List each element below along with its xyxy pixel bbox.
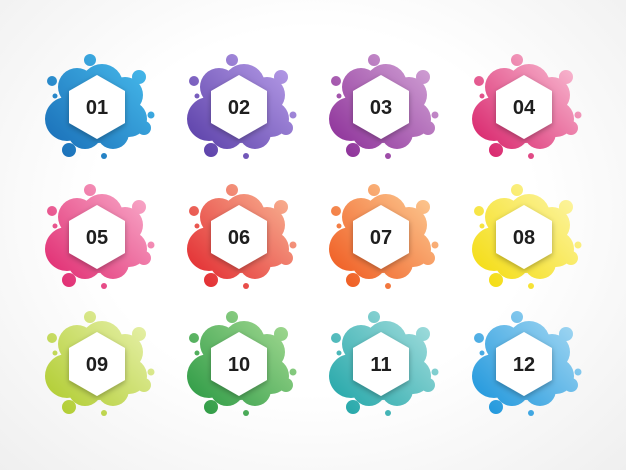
item 03 xyxy=(329,54,438,159)
item 10: 10 xyxy=(228,354,250,376)
item 08 xyxy=(472,184,582,289)
item 01 xyxy=(45,54,154,159)
item 06: 06 xyxy=(228,227,250,249)
item 12 xyxy=(472,311,582,416)
item 02 xyxy=(187,54,296,159)
item 11 xyxy=(329,311,438,416)
item 04: 04 xyxy=(513,97,536,119)
item 07 xyxy=(329,184,438,289)
item 07: 07 xyxy=(370,227,392,249)
item 05 xyxy=(45,184,154,289)
item 02: 02 xyxy=(228,97,250,119)
item 09 xyxy=(45,311,154,416)
item 09: 09 xyxy=(86,354,108,376)
item 10 xyxy=(187,311,296,416)
item 01: 01 xyxy=(86,97,108,119)
item 08: 08 xyxy=(513,227,535,249)
item 11: 11 xyxy=(370,354,392,376)
item 12: 12 xyxy=(513,354,535,376)
item 04 xyxy=(472,54,582,159)
item 05: 05 xyxy=(86,227,108,249)
item 03: 03 xyxy=(370,97,392,119)
item 06 xyxy=(187,184,296,289)
